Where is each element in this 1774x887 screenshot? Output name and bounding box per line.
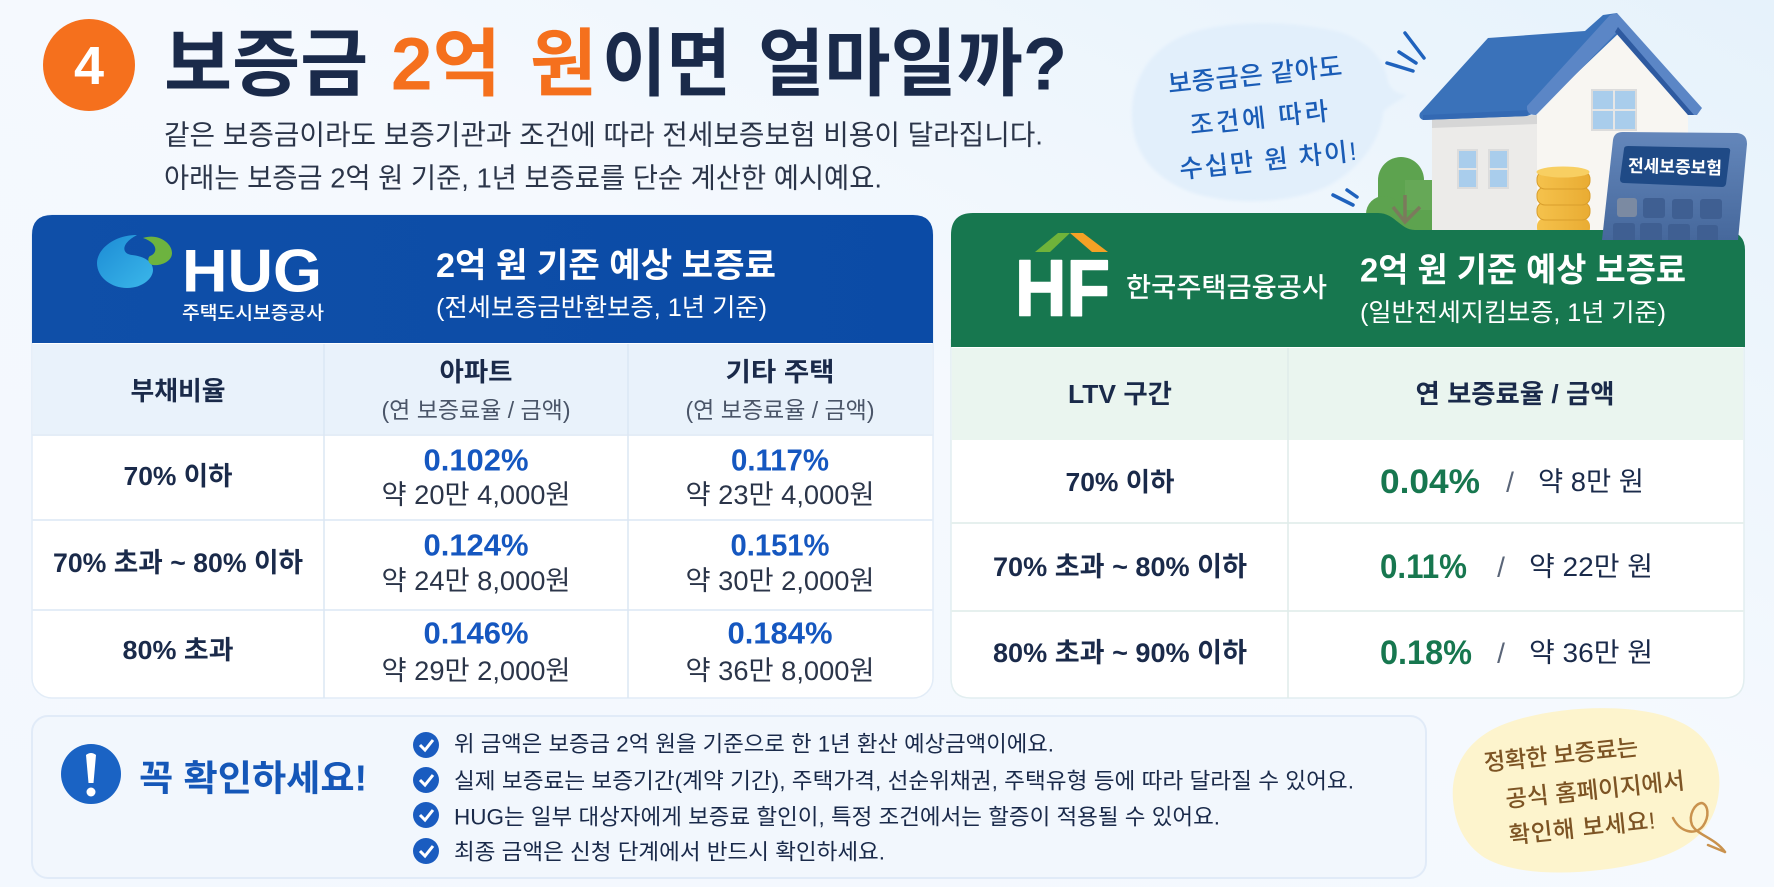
subtitle text: 같은 보증금이라도 보증기관과 조건에 따라 전세보증보험 비용이 달라집니다. xyxy=(164,120,1043,150)
HUG row: 70% or less xyxy=(124,442,874,510)
HF column headers: LTV 구간 xyxy=(1068,379,1172,409)
HF row: 70 to 80%: / xyxy=(1497,552,1505,582)
subtitle text xyxy=(164,120,1043,194)
HF column headers: 연 보증료율 / 금액 xyxy=(1416,379,1614,409)
HF row: 70 to 80%: 약 22만 원 xyxy=(1529,552,1653,582)
HUG row: 70% or less: 0.102% xyxy=(424,442,528,478)
HUG row: over 80%: 약 36만 8,000원 xyxy=(686,656,874,686)
house walls xyxy=(1432,117,1540,235)
HUG row: 70 to 80%: 약 30만 2,000원 xyxy=(686,566,874,596)
HUG row: over 80%: 약 29만 2,000원 xyxy=(382,656,570,686)
HF logo: HF xyxy=(1015,244,1110,332)
step number badge: 4 xyxy=(74,36,104,96)
HF header band xyxy=(951,213,1745,347)
HUG column headers: 아파트 xyxy=(440,357,512,387)
HUG logo xyxy=(97,235,324,324)
HF logo xyxy=(1015,233,1327,332)
coin stack xyxy=(1536,166,1590,236)
step number badge xyxy=(43,19,135,111)
speech bubble: 조건에 따라 xyxy=(1188,98,1330,140)
HF logo: 한국주택금융공사 xyxy=(1126,273,1327,303)
icon: calculator: 전세보증보험 xyxy=(1628,156,1722,178)
sticky note: 정확한 보증료는 xyxy=(1483,734,1639,776)
HUG row: 70% or less: 약 23만 4,000원 xyxy=(686,480,874,510)
HUG row: over 80%: 0.184% xyxy=(728,616,832,650)
HF row: 80 to 90%: 80% 초과 ~ 90% 이하 xyxy=(993,638,1247,668)
check item 1: 위 금액은 보증금 2억 원을 기준으로 한 1년 환산 예상금액이에요. xyxy=(454,732,1054,756)
tree xyxy=(1366,157,1432,235)
HF column headers xyxy=(1068,379,1614,409)
panel: HUG xyxy=(32,215,933,698)
HF table xyxy=(951,348,1744,698)
HF row: 80 to 90%: 0.18% xyxy=(1380,634,1472,672)
HUG column headers: (연 보증료율 / 금액) xyxy=(382,397,570,423)
accent sparks xyxy=(1333,33,1424,205)
notice heading: 꼭 확인하세요! xyxy=(139,758,367,798)
sticky note: 확인해 보세요! xyxy=(1508,807,1656,849)
HF heading: 2억 원 기준 예상 보증료 xyxy=(1360,252,1686,290)
check item 4: 최종 금액은 신청 단계에서 반드시 확인하세요. xyxy=(454,840,885,864)
check item 2: 실제 보증료는 보증기간(계약 기간), 주택가격, 선순위채권, 주택유형 등에 따라 달라질 수 있어요. xyxy=(454,768,1354,794)
HUG column headers xyxy=(130,357,874,423)
title: 이면 xyxy=(602,22,731,106)
HUG row: over 80%: 80% 초과 xyxy=(122,635,234,665)
HUG row: 70% or less: 0.117% xyxy=(731,442,829,478)
panel: notice xyxy=(32,716,1426,878)
HF row: 70 to 80% xyxy=(993,548,1653,586)
sticky note: 공식 홈페이지에서 xyxy=(1504,768,1686,812)
HUG logo: 주택도시보증공사 xyxy=(182,302,324,324)
HF heading: (일반전세지킴보증, 1년 기준) xyxy=(1360,299,1666,327)
sticky note xyxy=(1453,708,1725,873)
title: 보증금 xyxy=(164,22,368,106)
subtitle text: 아래는 보증금 2억 원 기준, 1년 보증료를 단순 계산한 예시예요. xyxy=(164,162,882,194)
house roof xyxy=(1419,13,1620,120)
HUG table xyxy=(32,344,933,698)
HF row: 70% or less xyxy=(1066,463,1644,501)
HF row: 80 to 90% xyxy=(993,634,1653,672)
HUG row: 70% or less: 70% 이하 xyxy=(124,461,233,491)
HF row: 80 to 90%: 약 36만 원 xyxy=(1529,638,1653,668)
icon: exclamation xyxy=(61,744,121,804)
HF row: 70% or less: 70% 이하 xyxy=(1066,467,1175,497)
HUG row: 70 to 80%: 70% 초과 ~ 80% 이하 xyxy=(53,548,303,578)
house windows xyxy=(1458,90,1636,188)
icon: calculator xyxy=(1602,132,1747,240)
HUG heading xyxy=(436,247,776,322)
curly arrow xyxy=(1673,803,1725,852)
HUG heading: 2억 원 기준 예상 보증료 xyxy=(436,247,776,285)
HF row: 70% or less: 약 8만 원 xyxy=(1538,467,1644,497)
HF row: 70% or less: / xyxy=(1506,466,1514,498)
HF row: 70 to 80%: 70% 초과 ~ 80% 이하 xyxy=(993,552,1247,582)
HUG row: 70 to 80%: 0.151% xyxy=(730,528,830,562)
HF row: 70 to 80%: 0.11% xyxy=(1380,548,1467,586)
HUG row: 70 to 80%: 0.124% xyxy=(424,528,528,562)
HUG column headers: 기타 주택 xyxy=(726,357,834,387)
icon: house with tree and coins xyxy=(1366,13,1702,236)
speech bubble xyxy=(1132,23,1407,201)
HUG column headers: (연 보증료율 / 금액) xyxy=(686,397,874,423)
title: 2억 xyxy=(391,22,501,106)
HUG heading: (전세보증금반환보증, 1년 기준) xyxy=(436,294,767,322)
title: 얼마일까? xyxy=(758,22,1067,106)
HUG header band xyxy=(32,215,933,343)
HUG logo: HUG xyxy=(182,238,322,304)
speech bubble: 보증금은 같아도 xyxy=(1167,53,1343,99)
title: 원 xyxy=(530,22,597,106)
HUG row: 70 to 80%: 약 24만 8,000원 xyxy=(382,566,570,596)
check item 3: HUG는 일부 대상자에게 보증료 할인이, 특정 조건에서는 할증이 적용될 수 있어요. xyxy=(454,804,1220,830)
HUG row: over 80% xyxy=(122,616,874,686)
panel: HF xyxy=(951,213,1745,698)
HF row: 80 to 90%: / xyxy=(1497,638,1505,668)
HUG row: 70 to 80% xyxy=(53,528,874,596)
HUG column headers: 부채비율 xyxy=(130,376,226,406)
title xyxy=(164,22,1067,106)
HUG row: over 80%: 0.146% xyxy=(424,616,528,650)
speech bubble: 수십만 원 차이! xyxy=(1178,138,1358,184)
HUG row: 70% or less: 약 20만 4,000원 xyxy=(382,480,570,510)
HF heading xyxy=(1360,252,1686,327)
HF row: 70% or less: 0.04% xyxy=(1380,463,1480,501)
